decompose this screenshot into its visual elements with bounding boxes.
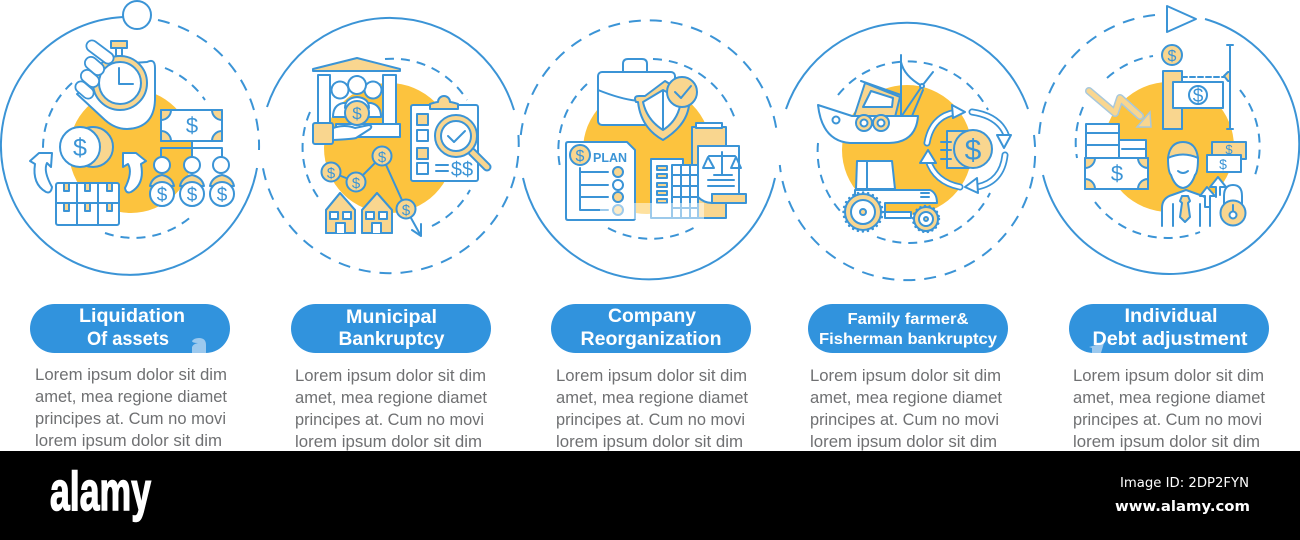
icon: briefcase with shield — [598, 59, 697, 140]
label pill: municipal bankruptcy: Municipal — [346, 307, 437, 328]
icon: houses — [326, 193, 392, 233]
watermark fade — [600, 203, 704, 219]
label pill: family farmer and fisherman bankruptcy: Fisherman bankruptcy — [819, 331, 997, 348]
label pill: company reorganization: Reorganization — [580, 329, 722, 350]
label pill: municipal bankruptcy: Bankruptcy — [338, 329, 445, 350]
text block: liquidation of assets: lorem ipsum dolor sit dim — [35, 431, 222, 450]
text block: municipal bankruptcy: principes at. Cum no movi — [295, 410, 484, 429]
panel: liquidation of assets — [1, 1, 259, 275]
yellow disc — [324, 83, 454, 213]
label pill: company reorganization: Company — [608, 306, 696, 327]
text block: liquidation of assets: amet, mea regione diamet — [35, 387, 227, 406]
text block: individual debt adjustment: Lorem ipsum dolor sit dim — [1073, 366, 1264, 385]
icon: banknote with heirs — [150, 110, 234, 206]
icon: exchange arrows — [30, 153, 146, 192]
text block: individual debt adjustment: lorem ipsum dolor sit dim — [1073, 432, 1260, 451]
icon: falling money chart — [322, 146, 421, 236]
text block: family farmer and fisherman bankruptcy: amet, mea regione diamet — [810, 388, 1002, 407]
icon: money cycle: $ — [965, 134, 982, 167]
icon: bank with people and hand: $ — [352, 104, 362, 123]
text block: company reorganization: principes at. Cum no movi — [556, 410, 745, 429]
icon: clipboard with magnifier — [411, 96, 487, 181]
label pill: individual debt adjustment: Individual — [1124, 306, 1218, 327]
panel: company reorganization — [521, 20, 777, 279]
label pill: liquidation of assets: Liquidation — [79, 306, 185, 327]
label pill: family farmer and fisherman bankruptcy: Family farmer& — [848, 311, 969, 328]
icon: law documents — [692, 123, 746, 218]
label pill: individual debt adjustment: Debt adjustment — [1092, 329, 1248, 350]
icon: tractor — [844, 161, 939, 232]
icon: plan document — [566, 142, 635, 220]
icon: coins — [60, 127, 113, 167]
icon: bank with people and hand — [313, 58, 400, 144]
icon: clipboard with magnifier: $$ — [451, 159, 473, 181]
yellow disc — [583, 86, 711, 214]
label pill: individual debt adjustment — [1069, 304, 1269, 353]
icon: up arrows — [1200, 177, 1226, 207]
text block: company reorganization: Lorem ipsum dolor sit dim — [556, 366, 747, 385]
icon: cash stack — [1085, 124, 1148, 189]
text block: municipal bankruptcy: lorem ipsum dolor sit dim — [295, 432, 482, 451]
icon: hand with stopwatch — [77, 41, 155, 129]
icon: banknote with heirs: $ — [187, 185, 198, 206]
ring with triangle marker — [1039, 6, 1299, 274]
icon: office buildings — [651, 159, 698, 218]
ring — [521, 20, 777, 279]
panel: family farmer and fisherman bankruptcy — [780, 23, 1035, 280]
icon: banknote with heirs: $ — [157, 185, 168, 206]
text block: municipal bankruptcy — [295, 366, 487, 451]
icon: small banknotes: $ — [1219, 156, 1227, 172]
label pill: liquidation of assets — [30, 304, 230, 353]
text block: family farmer and fisherman bankruptcy: lorem ipsum dolor sit dim — [810, 432, 997, 451]
icon: banknote with heirs: $ — [217, 185, 228, 206]
website: www.alamy.com — [1115, 499, 1250, 515]
text block: liquidation of assets: principes at. Cum no movi — [35, 409, 226, 428]
icon: padlock — [1220, 185, 1246, 226]
text block: company reorganization: amet, mea regione diamet — [556, 388, 748, 407]
text block: municipal bankruptcy: Lorem ipsum dolor sit dim — [295, 366, 486, 385]
yellow disc — [69, 89, 193, 213]
text block: family farmer and fisherman bankruptcy: Lorem ipsum dolor sit dim — [810, 366, 1001, 385]
text block: individual debt adjustment: principes at. Cum no movi — [1073, 410, 1262, 429]
icon: falling money chart: $ — [378, 149, 387, 166]
icon: flag with money: $ — [1193, 86, 1204, 107]
icon: falling arrow — [1089, 91, 1151, 127]
yellow disc — [1104, 82, 1234, 212]
icon: small banknotes — [1207, 142, 1246, 172]
label pill: company reorganization — [551, 304, 751, 353]
icon: plan document: $ — [576, 148, 585, 165]
label pill: liquidation of assets: Of assets — [87, 329, 169, 350]
text block: liquidation of assets — [35, 365, 227, 450]
text block: municipal bankruptcy: amet, mea regione diamet — [295, 388, 487, 407]
label pill: family farmer and fisherman bankruptcy — [808, 304, 1008, 353]
ring — [262, 18, 519, 273]
text block: individual debt adjustment — [1073, 366, 1265, 451]
icon: falling money chart: $ — [352, 175, 361, 192]
icon: falling money chart: $ — [402, 202, 411, 219]
text block: individual debt adjustment: amet, mea regione diamet — [1073, 388, 1265, 407]
icon: fishing boat — [818, 55, 933, 143]
icon: plan document: PLAN — [593, 150, 627, 165]
icon: cash stack: $ — [1111, 161, 1123, 186]
image id: Image ID: 2DP2FYN — [1120, 475, 1249, 491]
panel: individual debt adjustment — [1039, 6, 1299, 274]
ring — [780, 23, 1035, 280]
text block: company reorganization: lorem ipsum dolor sit dim — [556, 432, 743, 451]
footer band — [0, 451, 1300, 540]
text block: family farmer and fisherman bankruptcy: principes at. Cum no movi — [810, 410, 999, 429]
icon: coins: $ — [73, 134, 87, 162]
text block: family farmer and fisherman bankruptcy — [810, 366, 1002, 451]
icon: banknote with heirs: $ — [186, 113, 198, 138]
label pill: municipal bankruptcy — [291, 304, 491, 353]
icon: man with tie — [1162, 142, 1210, 226]
icon: small banknotes: $ — [1225, 142, 1233, 157]
panel: municipal bankruptcy — [262, 18, 519, 273]
ring with progress marker — [1, 1, 259, 275]
icon: money cycle — [920, 105, 1011, 193]
icon: flag with money — [1162, 45, 1233, 129]
icon: flag with money: $ — [1168, 48, 1177, 65]
text block: company reorganization — [556, 366, 748, 451]
icon: falling money chart: $ — [327, 165, 336, 182]
yellow disc — [842, 85, 972, 215]
icon: boxes — [56, 183, 119, 225]
logo wordmark: alamy — [50, 460, 151, 522]
text block: liquidation of assets: Lorem ipsum dolor sit dim — [35, 365, 227, 384]
